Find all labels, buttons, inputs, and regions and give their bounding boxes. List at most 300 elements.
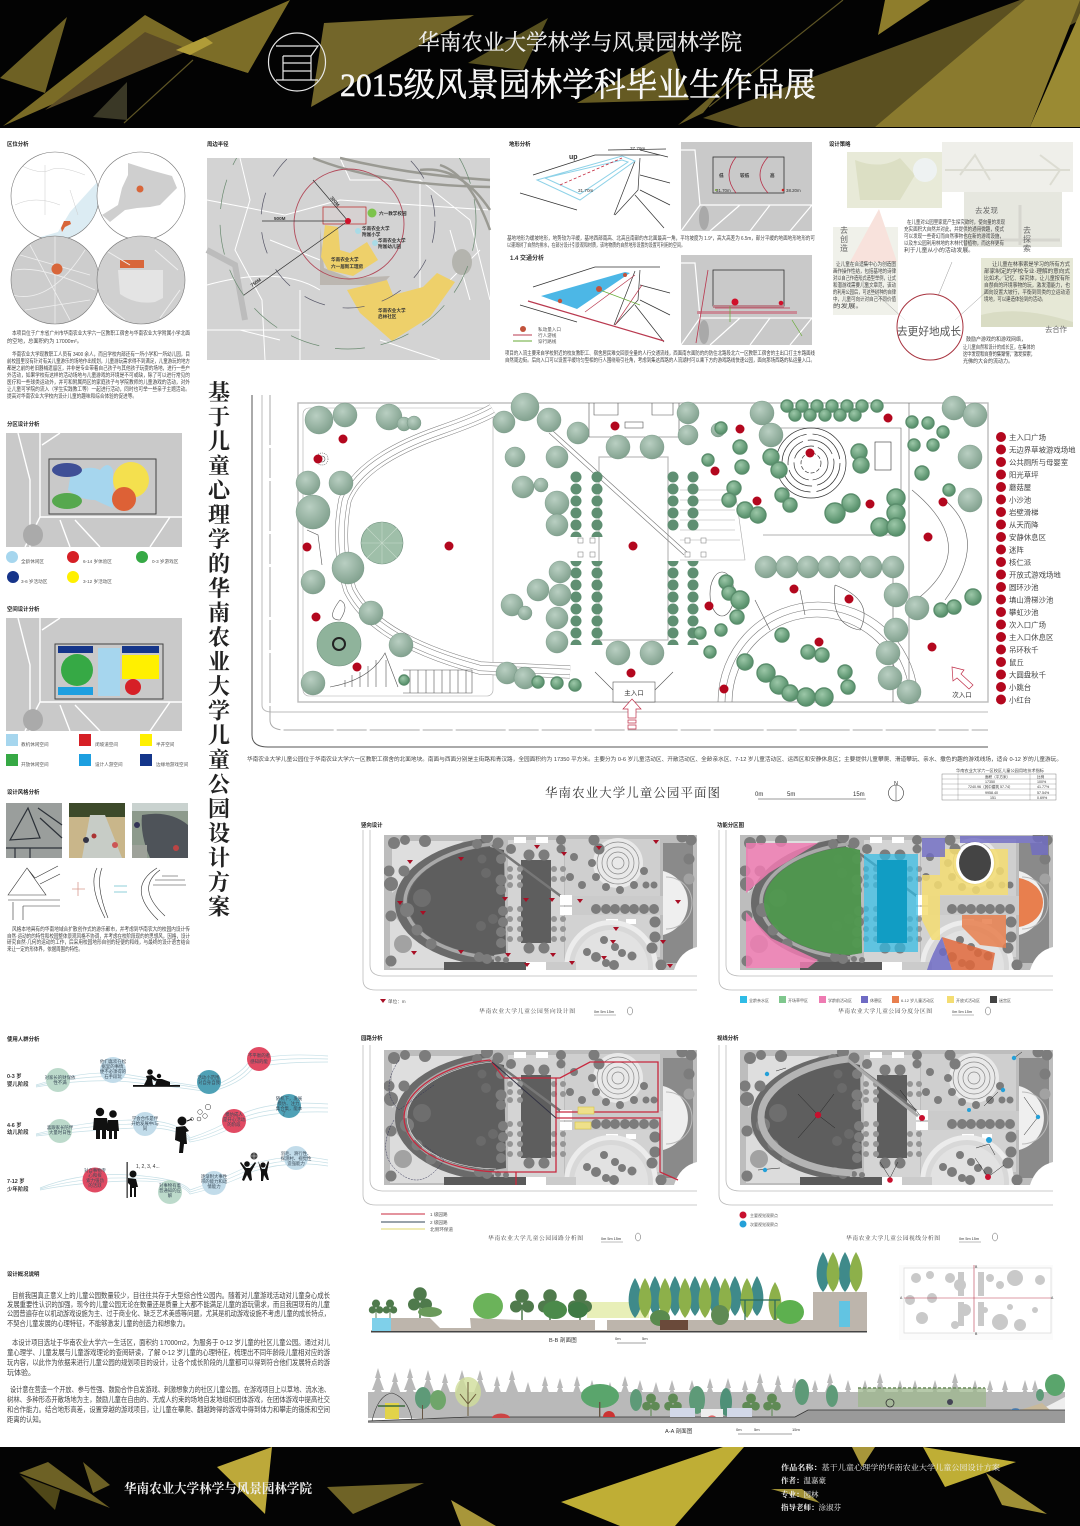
plan legend: 小沙池	[1009, 496, 1032, 504]
stage labels	[7, 1072, 29, 1193]
map labels: 启林社区	[378, 313, 397, 320]
colour overlays	[746, 836, 1048, 970]
strategy text: 以及东公园利用林地的木林代替植物，而这样更有	[904, 239, 1005, 247]
pergola	[858, 1388, 986, 1407]
row 3 bubbles: 带的能力和动	[201, 1178, 228, 1185]
scale: 5m	[642, 1336, 648, 1341]
stage labels: 少年阶段	[7, 1185, 29, 1193]
panel: traffic analysis	[505, 254, 815, 364]
photos	[6, 803, 188, 858]
icon: parent and baby	[133, 1069, 180, 1087]
traffic site map	[681, 255, 812, 345]
terrain site map	[681, 142, 812, 231]
row 3 bubbles: 逐渐附大事性	[201, 1173, 228, 1180]
paragraph: site: 都是之前的老旧器械遗留区，并非是专业带着自己孩子与其他孩子玩耍的场地，进行一些户	[7, 364, 190, 372]
zoning legend	[740, 996, 1011, 1003]
table: planning indicators: 41.77%	[1037, 785, 1050, 789]
heading: 分区设计分析	[7, 420, 40, 428]
space legend: 开放休闲空间	[21, 761, 49, 768]
paragraph: site: 外活动，如果学校有这样的活动场地与儿童游戏的环境是不可或缺，除了可以进行常见的	[7, 371, 190, 379]
paragraph 2: 玩体验。	[7, 1368, 35, 1377]
row 3 bubbles: 索力强劲	[86, 1177, 104, 1184]
zoning legend: 开场草甲区	[788, 997, 808, 1003]
winding path	[341, 410, 570, 672]
space legend: 设计人游空间	[95, 761, 123, 768]
space map	[6, 618, 182, 731]
strategy text: 的发展。	[833, 302, 863, 310]
row 2 bubbles: 了	[282, 1110, 286, 1116]
row 3 bubbles: 情能力	[207, 1183, 221, 1190]
paragraph 1	[7, 1291, 331, 1328]
caption: 风格本地具有的华南地域合扩散创作式的游乐都市，并考虑到华南农大的校园内设计传	[12, 925, 191, 933]
scale	[959, 1233, 998, 1242]
entrance labels	[623, 667, 973, 729]
green small trees	[399, 400, 981, 706]
section B-B	[369, 1252, 867, 1344]
site outline	[298, 403, 988, 702]
zoning legend: 学龄前活动区	[828, 997, 852, 1003]
key plan: A	[900, 1296, 903, 1300]
table: planning indicators: 华南农业大学六一区校区儿童公园用地技术指标	[956, 767, 1044, 774]
strategy labels: 索	[1023, 243, 1031, 253]
paragraph 3: 设计意在营造一个开放、参与性强、鼓励合作自发游戏、刺激想象力的社区儿童公园。在游戏项目上以草地、流水池、	[10, 1385, 330, 1394]
zoning legend: 6-14 岁体验区	[83, 558, 112, 565]
row 2 bubbles: 随机下，发展	[276, 1095, 303, 1102]
scale	[952, 1007, 990, 1015]
map title: 华南农业大学儿童公园竖向设计图	[479, 1007, 575, 1015]
stage labels: 幼儿阶段	[7, 1128, 29, 1136]
plan legend: 从天而降	[1009, 520, 1039, 530]
row 2 bubbles: 模仿成人	[225, 1111, 243, 1118]
strategy labels: 探	[1023, 234, 1031, 244]
map title: 华南农业大学儿童公园分度分区图	[838, 1007, 932, 1015]
route legend: 北侧环保道	[430, 1226, 453, 1233]
strategy text: 利于儿童从小的活动发展。	[904, 246, 974, 254]
plan legend: 鼠丘	[1009, 658, 1024, 667]
footer credits: 作者：温嘉豪	[781, 1475, 826, 1485]
trees	[415, 1374, 1065, 1419]
radius circles	[220, 158, 476, 350]
map labels: 华南农业大学	[362, 225, 390, 232]
entrance labels: 主入口	[624, 688, 644, 697]
strategy text: 中，儿童可向计对自己不同价值	[833, 295, 896, 303]
patterned large trees	[317, 522, 403, 666]
paragraph: site: 提高对华南农业大学校内设计儿童的趣味和综合体验的促进等。	[7, 392, 137, 400]
row 3 bubbles: 探测村、视觉性	[281, 1155, 312, 1162]
caption: 项目的入流主要来自学校附近的校友教职工、宿舍居民难交回景全量的人行交通流线，西面南东面防的的防住北路段北六一区教职工宿舍的主出口打主东路面线	[505, 349, 815, 357]
zoning legend: 3-6 岁活动区	[21, 578, 48, 585]
row 3 bubbles: 羽毛、滑行性、	[281, 1150, 311, 1157]
zoning legend: 迷宫区	[999, 997, 1011, 1003]
red location dots	[302, 414, 948, 694]
strategy labels: 创	[840, 234, 848, 244]
row 1 bubbles: 感知的能	[250, 1058, 268, 1065]
low structures	[492, 1408, 1020, 1418]
strategy text: 可以发现一些奇幻而自然事物也在新的游戏设施，	[904, 232, 1004, 240]
scale: 0m	[736, 1427, 742, 1432]
table: planning indicators: 17350	[985, 780, 995, 784]
scale	[594, 1007, 632, 1015]
paragraph 1: 不契合儿童发展的心理特征，不能够激发儿童的创造力和想象力。	[7, 1319, 189, 1328]
strategy labels	[840, 205, 1068, 334]
paragraph 3	[7, 1385, 331, 1424]
table: planning indicators: 面积（平方米）	[985, 774, 1010, 779]
footer credits	[781, 1462, 1001, 1512]
strategy labels: 去合作	[1045, 324, 1068, 334]
site marker	[323, 207, 366, 224]
heading: 地形分析	[509, 140, 531, 148]
panel: design overview text	[7, 1270, 331, 1424]
label: B-B 剖面图	[549, 1336, 577, 1344]
row 2 bubbles: 同	[143, 1126, 148, 1132]
strategy text: 和潜游戏需要儿童文章范，该动	[833, 281, 896, 289]
strategy text: 鼓励户游戏的和游戏网络，	[966, 335, 1026, 343]
row 3 bubbles: 造强能力	[287, 1160, 305, 1167]
yellow areas	[321, 225, 378, 276]
tall leaf trees	[629, 1252, 862, 1322]
scale: 0m 5m 15m	[594, 1010, 614, 1014]
plan caption: 华南农业大学儿童公园位于华南农业大学六一区教职工宿舍的北面地块。南面与西面分别是主街路和青汉路，全园面积约为 17350 平方米。主要分为 0-6 岁儿童活动区、开敞活动区、全龄亲水区、7-12 岁儿童活动区、运西区和安静休息区；主要提供儿童攀爬、滑道攀玩、亲水、撒色的趣的游戏线场，适合 0-12 岁的儿童游玩。	[247, 755, 1062, 763]
title: college: 华南农业大学林学与风景园林学院	[418, 30, 742, 55]
section A-A	[367, 1368, 1065, 1435]
table: planning indicators: 100%	[1037, 780, 1047, 784]
row 1 bubbles	[45, 1047, 271, 1094]
paragraph: site: 华南农业大学现教职工人员有 3400 余人，而且学校内部还有一所小学和一所幼儿园，目	[12, 350, 190, 358]
legend: 私动量入口	[538, 326, 561, 333]
elevation legend	[380, 998, 406, 1005]
plan legend: 蘑菇屋	[1009, 483, 1031, 492]
plan legend: 主入口休息区	[1009, 633, 1054, 642]
plan legend	[996, 432, 1076, 704]
row 3 bubbles: 的活跃	[88, 1182, 102, 1189]
terrain site map: 较低	[740, 172, 750, 179]
paragraph 2: 本设计项目选址于华南农业大学六一生活区，面积约 17000m2，为服务于 0-12 岁儿童的社区儿童公园。通过对儿	[12, 1338, 331, 1347]
table: planning indicators: 151	[990, 796, 996, 800]
row 3 bubbles: 对事物有着	[159, 1182, 182, 1189]
trees	[296, 393, 987, 704]
legend: 行人游线	[538, 332, 557, 339]
road lines	[252, 395, 988, 747]
map labels: 500M	[274, 216, 286, 221]
plan legend: 迷阵	[1009, 546, 1024, 554]
stage labels: 0-3 岁	[7, 1072, 22, 1080]
panel: elevation design map	[361, 821, 697, 1015]
sightlines and viewpoints	[758, 1052, 1040, 1183]
paragraph 3: 和合作能力。结合地形高差，设置穿越的游戏项目，让儿童在攀爬、翻越跨得的游戏中得到体力和攀走的锻炼和空间	[7, 1405, 330, 1414]
view legend	[740, 1212, 778, 1228]
icon: counting child	[126, 1162, 160, 1198]
plan structures	[307, 403, 968, 702]
table: planning indicators: 57.54%	[1037, 791, 1050, 795]
stage labels: 4-6 岁	[7, 1121, 22, 1129]
strategy text: 画作操作性结，包括基地的诗律	[833, 267, 896, 275]
route legend: 1 级园路	[430, 1211, 448, 1218]
strategy text: 面向设置大坡行，平衡到同类的立运动道	[984, 288, 1071, 296]
row 2 bubbles: 学会合作是伴	[132, 1115, 159, 1122]
pale backdrop	[587, 1302, 649, 1318]
plan legend: 小红台	[1009, 696, 1031, 704]
row 3 bubbles: 解	[168, 1192, 173, 1199]
view legend: 次要视觉观察点	[750, 1221, 778, 1227]
zoning legend	[6, 551, 179, 585]
heading: 功能分区图	[717, 821, 744, 829]
panel: traffic analysis: 自然周边街。后向入口可以设置平缓均匀型相的行人围绕吸引社角，考虑到集这西路的人流湖村可以乘下方的游戏路线快速公园，面向那场西路的私运量入口。	[505, 356, 815, 364]
growth circle	[897, 294, 963, 360]
plan legend: 公共厕所与母婴室	[1009, 458, 1068, 467]
planter columns	[570, 471, 707, 645]
row 2 bubbles: 开始发展中/与	[131, 1120, 159, 1127]
plan legend: 圆环沙池	[1009, 583, 1039, 592]
header banner	[0, 0, 1080, 128]
stage labels: 婴儿阶段	[7, 1080, 29, 1088]
paragraph: site: 前校园里没有针对有关儿童游乐的场地作出规划，儿童游玩需求得不到满足，儿童游玩的地方	[7, 357, 190, 365]
plan legend: 开放式游戏场地	[1009, 570, 1061, 580]
scale: 0m 5m 15m	[959, 1237, 979, 1241]
strategy labels: 去	[1023, 225, 1031, 235]
terrain site map: 低	[719, 172, 724, 179]
caption: 基地地形为缓坡地形，地势较为平缓，基地西部南高、北高且南部的东北面最高一角，平均坡度为 1.9°，高大高差为 6.5m，部分平缓的地面地形地形的可	[507, 234, 816, 242]
icon: north arrow	[888, 781, 904, 801]
paragraph 1: 发展重要性认识的加强，现今的儿童公园无论在数量还是质量上大都不能满足儿童的游玩需求，而且我国现有的儿童	[7, 1300, 331, 1309]
strategy text: 光佛的大合的流动力。	[963, 357, 1013, 365]
paragraph: site: 的空地，总面积约为 17000m²。	[7, 337, 82, 345]
paragraph 2	[7, 1338, 331, 1377]
strategy text: 比如术、记忆、探究体，让儿童按有所	[984, 274, 1071, 282]
caption: 自然·运动的的特性和校园整体景观风格不协调，并考虑在校阶段现的的思想风，因格，设计	[7, 932, 191, 940]
row 2 bubbles: 集合集，能本	[276, 1105, 303, 1112]
faded photos	[833, 142, 1073, 327]
zoning legend: 6-12 岁儿童活动区	[901, 997, 934, 1003]
zoning map	[6, 433, 182, 547]
ground	[368, 1410, 1065, 1423]
plan scale bar: 5m	[787, 792, 795, 798]
heading: 区位分析	[7, 140, 29, 148]
traffic diagram	[520, 267, 670, 342]
heading: 1.4 交通分析	[510, 254, 544, 262]
paragraph: site	[7, 329, 191, 400]
plan legend: 吊环秋千	[1009, 646, 1039, 654]
key plan: B	[975, 1265, 978, 1269]
panel: functional zoning map	[717, 821, 1053, 1015]
heading: 使用人群分析	[7, 1035, 40, 1043]
scale: 5m	[754, 1427, 760, 1432]
elevation markers	[397, 840, 681, 968]
heading: 周边半径	[207, 140, 229, 148]
strategy text: 充实面积大自然并对此，并提供的通用微趣，使式	[904, 225, 1005, 233]
conifer silhouette	[368, 1368, 1065, 1418]
row 2 bubbles	[47, 1094, 303, 1143]
footer credits: 作品名称： 基于儿童心理学的华南农业大学儿童公园设计方案	[781, 1462, 1001, 1472]
key plan: B	[975, 1332, 978, 1336]
zoning legend: 开放式活动区	[956, 997, 980, 1003]
strategy text: 让儿童在林事索是学习的所有方式	[992, 260, 1071, 268]
table: planning indicators: 比例	[1037, 774, 1045, 779]
footer credits: 专业：园林	[781, 1489, 819, 1499]
strategy text: 自然自的环境事物的玩，激发潜能力，也	[984, 281, 1071, 289]
icon: counting child: 1, 2, 3, 4...	[136, 1164, 160, 1170]
table: planning indicators: 9958.40	[985, 791, 998, 795]
icon: child blowing bubbles	[175, 1104, 211, 1153]
icon: school logo	[268, 33, 326, 91]
strategy text: 在儿童对公园里家庭产生探究欲时，使向量的发现	[907, 218, 1005, 226]
map labels: 华南农业大学	[331, 256, 359, 263]
panel: space analysis	[6, 605, 189, 768]
map labels: 六一教学校园	[379, 210, 407, 217]
plan legend: 核仁派	[1009, 558, 1032, 567]
space legend: 闭坡道空间	[95, 741, 118, 748]
zoning legend: 全龄休闲区	[21, 558, 44, 565]
row 1 bubbles: 石手段玩	[104, 1073, 122, 1080]
paragraph 1: 目前我国真正意义上的儿童公园数量较少，目往往共存于大型综合性公园内。随着对儿童游戏活动对儿童身心成长	[12, 1291, 331, 1300]
strategy text: 境地，可以建造体验到的活动。	[984, 295, 1046, 303]
footer credits: 指导老师：涂淑芬	[781, 1502, 841, 1512]
map title: 华南农业大学儿童公园园路分析图	[488, 1234, 583, 1242]
heading: 空间设计分析	[7, 605, 40, 613]
scale: 0m	[615, 1336, 621, 1341]
row 1 bubbles: 性不满	[53, 1079, 67, 1086]
zoning legend: 0-3 岁游戏区	[152, 558, 179, 565]
red routes	[386, 1060, 678, 1185]
plan legend: 小跳台	[1009, 683, 1031, 692]
terrain diagram	[520, 149, 670, 228]
map labels: 华南农业大学	[378, 237, 406, 244]
space legend: 教机休闲空间	[21, 741, 49, 748]
paragraph: site: 医疗和一些球类运动外，并可和附属两区的家庭孩子与学院教师的儿童游戏的活动，对外	[7, 378, 191, 386]
map labels: 750M	[250, 277, 262, 288]
terrain site map: 31.70m	[716, 188, 731, 193]
panel: surrounding radius map	[206, 141, 492, 360]
plan legend: 大圆盘秋千	[1009, 670, 1046, 680]
heading: 设计概况说明	[7, 1270, 40, 1278]
strategy text: 让儿童自然和设计的成长区，在集体的	[963, 343, 1035, 351]
plan scale bar: 15m	[853, 792, 865, 798]
paragraph: site: 让儿童可学院的流入（学生实践教工等）一起进行活动，同时也可举一些亲子主题活动。	[7, 385, 190, 393]
heading: 设计策略	[829, 140, 851, 148]
paragraph 1: 公园普遍存在以机动游戏设施为主、过于商业化、缺乏艺术美感等问题，尤其是机动游戏设施不考虑儿童的成长特点，	[7, 1309, 330, 1318]
panel: design strategy	[829, 140, 1073, 365]
stage labels: 7-12 岁	[7, 1177, 25, 1185]
table: planning indicators: 0.69%	[1037, 796, 1048, 800]
scale	[601, 1233, 640, 1242]
caption: 来让一定的形体界，依据周围的特性。	[7, 945, 83, 953]
vertical title: 基于儿童心理学的华南农业大学儿童公园设计方案	[207, 380, 233, 920]
row 2 bubbles: 模仿、注力,	[277, 1100, 301, 1107]
key plan: A	[1051, 1296, 1054, 1300]
row 1 bubbles: 对自身自我	[198, 1079, 221, 1086]
view legend: 主要视觉观察点	[750, 1212, 778, 1218]
row 2 bubbles: 的阶段	[227, 1121, 241, 1128]
terrain site map: 高	[770, 172, 775, 179]
strategy text	[833, 218, 1071, 365]
terrain site map: 38.20m	[786, 188, 801, 193]
map background	[207, 158, 490, 360]
entrance labels: 次入口	[952, 690, 972, 699]
panel: user group analysis	[7, 1035, 328, 1204]
table: planning indicators: 7240.96（其中建筑 57.74）	[968, 784, 1013, 789]
icon: children playing ball	[240, 1152, 269, 1181]
legend: 穿行路线	[538, 338, 557, 345]
plan legend: 攀虹沙池	[1009, 608, 1039, 617]
row 3 bubbles	[82, 1146, 312, 1204]
map labels: 300M	[329, 195, 341, 208]
panel: zoning analysis	[6, 420, 182, 585]
paragraph 2: 玩内容，以此作为依据来进行儿童公园的规划项目的设计，让各个成长阶段的儿童都可以得到符合他们发展特点的游	[7, 1358, 331, 1367]
heading: 视线分析	[717, 1034, 739, 1042]
map title: 华南农业大学儿童公园视线分析图	[846, 1234, 940, 1242]
label: A-A 剖面图	[665, 1427, 693, 1435]
heading: 园路分析	[361, 1034, 383, 1042]
plan legend: 无边界草坡游戏场地	[1009, 446, 1076, 454]
strategy text: 的利用公园后，可这些树种的自律	[833, 288, 896, 296]
panel: design style	[6, 788, 191, 953]
map labels: 附属幼儿园	[378, 243, 401, 250]
caption	[7, 925, 191, 953]
row 3 bubbles: 对自事物专	[84, 1167, 107, 1174]
panel: terrain analysis: 31.70m	[578, 188, 593, 193]
plan legend: 安静休息区	[1009, 533, 1047, 542]
map labels: 附属小学	[362, 231, 381, 238]
heading: 竖向设计	[361, 821, 383, 829]
row 2 bubbles: 大量时日性	[49, 1129, 72, 1136]
icon: two people	[93, 1108, 119, 1139]
strategy labels: 去	[840, 225, 848, 235]
scale	[615, 1336, 648, 1343]
space legend	[6, 734, 189, 768]
map labels: 六一居新工理房	[331, 263, 364, 270]
paragraph 3: 距离的认知。	[7, 1415, 45, 1424]
legend	[513, 326, 561, 345]
panel: terrain analysis: up	[569, 154, 578, 161]
space legend: 半开空间	[156, 741, 175, 748]
scale: 0m 5m 15m	[952, 1010, 972, 1014]
panel: circulation map	[361, 1034, 697, 1242]
strategy text: 这中发现和自身的集聚情，激发探索，	[963, 350, 1035, 358]
plan legend: 岩壁滑梯	[1009, 508, 1039, 517]
scale: 0m 5m 15m	[601, 1237, 621, 1241]
paragraph 3: 树林、多种形态开敞场地为主，鼓励儿童在自由的、无成人约束的场地自发地组织团体游戏，在团体游戏中提高社交	[7, 1395, 331, 1404]
zoning legend: 全龄亲水区	[749, 997, 769, 1003]
wave lines	[36, 1055, 328, 1194]
plan title: 华南农业大学儿童公园平面图	[545, 785, 720, 800]
row 1 bubbles: 对家长的财保依	[45, 1074, 76, 1081]
elevation legend: 单位：m	[388, 998, 406, 1005]
plan legend: 填山滑梯沙池	[1009, 596, 1054, 604]
footer banner	[0, 1447, 1080, 1526]
plan scale bar: 0m	[755, 792, 763, 798]
map labels	[250, 195, 407, 320]
panel: terrain analysis: 37.79m	[630, 146, 645, 151]
row 1 bubbles: 便不必须得的	[100, 1068, 127, 1075]
title: exhibition: 2015级风景园林学科毕业生作品展	[340, 67, 816, 104]
ground and building	[371, 1292, 867, 1332]
key plan	[899, 1265, 1054, 1340]
scale: 15m	[792, 1427, 800, 1432]
map circles	[11, 152, 185, 324]
small trees	[369, 1287, 804, 1326]
dome structure	[372, 1393, 412, 1421]
strategy text: 让儿童在合适集中心为创造图	[836, 260, 896, 268]
paragraph: site: 本项目位于广东省广州市华南农业大学六一区教职工宿舍与华南农业大学附属小学北面	[12, 329, 191, 337]
footer college name: 华南农业大学林学与风景园林学院	[124, 1481, 312, 1496]
row 1 bubbles: 活动小范围,	[197, 1074, 221, 1081]
strategy text: 部家制定的学校专业·理解的意向式	[984, 267, 1071, 275]
scale	[736, 1427, 800, 1434]
row 3 bubbles: 心和探	[88, 1172, 102, 1179]
paragraph 2: 童心理学、儿童发展与儿童游戏理论的查阅研读，了解 0-12 岁儿童的心理特征，梳理出不同年龄段儿童相对应的游	[7, 1348, 331, 1357]
panel: sightline map	[717, 1034, 1053, 1242]
growth circle: 去更好地成长	[897, 324, 961, 338]
table: planning indicators	[942, 767, 1056, 800]
